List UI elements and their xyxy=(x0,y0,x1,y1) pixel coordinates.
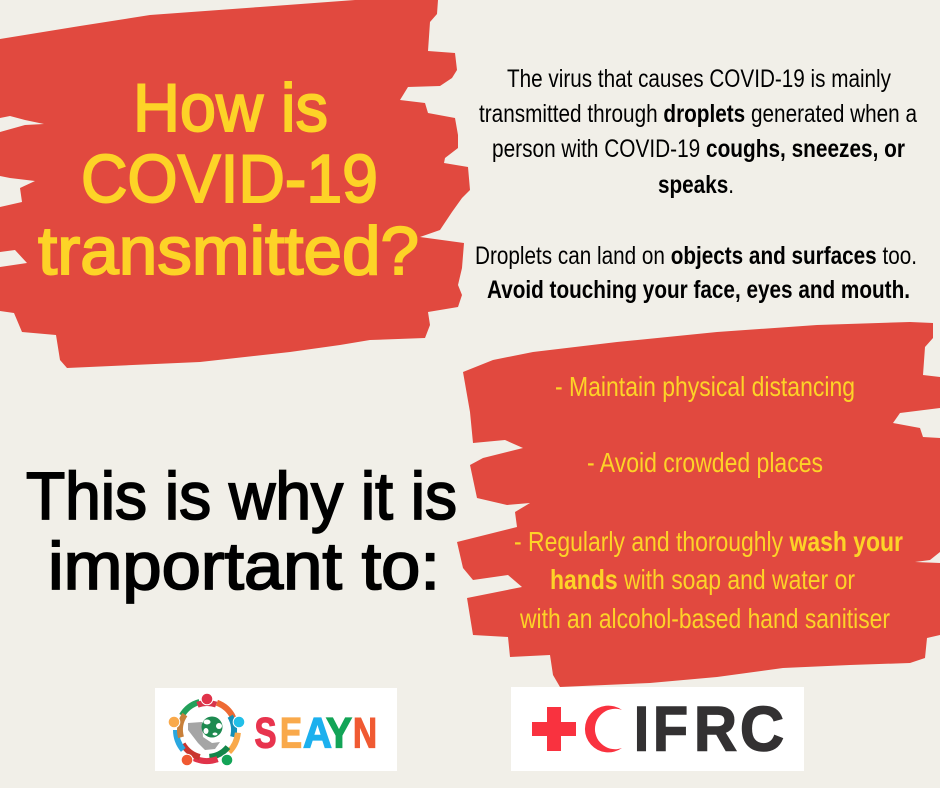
wordmark: SEAYN: E xyxy=(280,710,302,758)
title: How is COVID-19 transmitted?: How is xyxy=(133,70,328,146)
text block: how the virus spreads: speaks. xyxy=(658,171,734,199)
logo: IFRC xyxy=(511,687,804,771)
icon: red crescent xyxy=(585,706,622,752)
text block: how the virus spreads: Droplets can land on objects and surfaces too. xyxy=(475,242,917,270)
wordmark: IFRC: C xyxy=(740,694,784,764)
wordmark: IFRC xyxy=(634,694,784,764)
title: How is COVID-19 transmitted? xyxy=(38,70,419,289)
title: How is COVID-19 transmitted?: COVID-19 xyxy=(81,141,378,217)
text block: prevention actions xyxy=(514,371,903,634)
text block: how the virus spreads: person with COVID-19 coughs, sneezes, or xyxy=(492,135,905,163)
text block: prevention actions: hands with soap and water or xyxy=(550,564,855,595)
heading: This is why it is important to: important to: xyxy=(48,530,440,604)
wordmark: IFRC: I xyxy=(634,694,649,764)
brush panel: title background xyxy=(0,0,470,368)
wordmark: SEAYN: N xyxy=(353,710,377,758)
text block: how the virus spreads: transmitted through droplets generated when a xyxy=(479,100,917,128)
text block: prevention actions: - Maintain physical distancing xyxy=(555,371,855,402)
wordmark: IFRC: F xyxy=(653,694,688,764)
brush panel: prevention background xyxy=(457,322,940,687)
heading: This is why it is important to xyxy=(26,460,457,604)
wordmark: SEAYN: Y xyxy=(326,710,352,758)
logo: SEAYN xyxy=(155,686,397,774)
wordmark: SEAYN xyxy=(254,710,377,758)
text block: prevention actions: - Regularly and thoroughly wash your xyxy=(514,526,903,557)
wordmark: SEAYN: A xyxy=(303,710,332,758)
text block: how the virus spreads xyxy=(475,65,917,304)
text block: prevention actions: - Avoid crowded places xyxy=(587,447,823,478)
icon: red cross xyxy=(532,707,576,751)
heading: This is why it is important to: This is why it is xyxy=(26,460,457,534)
title: How is COVID-19 transmitted?: transmitted? xyxy=(38,213,419,289)
icon: SEAYN emblem xyxy=(163,686,251,774)
wordmark: SEAYN: S xyxy=(254,710,276,758)
wordmark: IFRC: R xyxy=(694,694,737,764)
